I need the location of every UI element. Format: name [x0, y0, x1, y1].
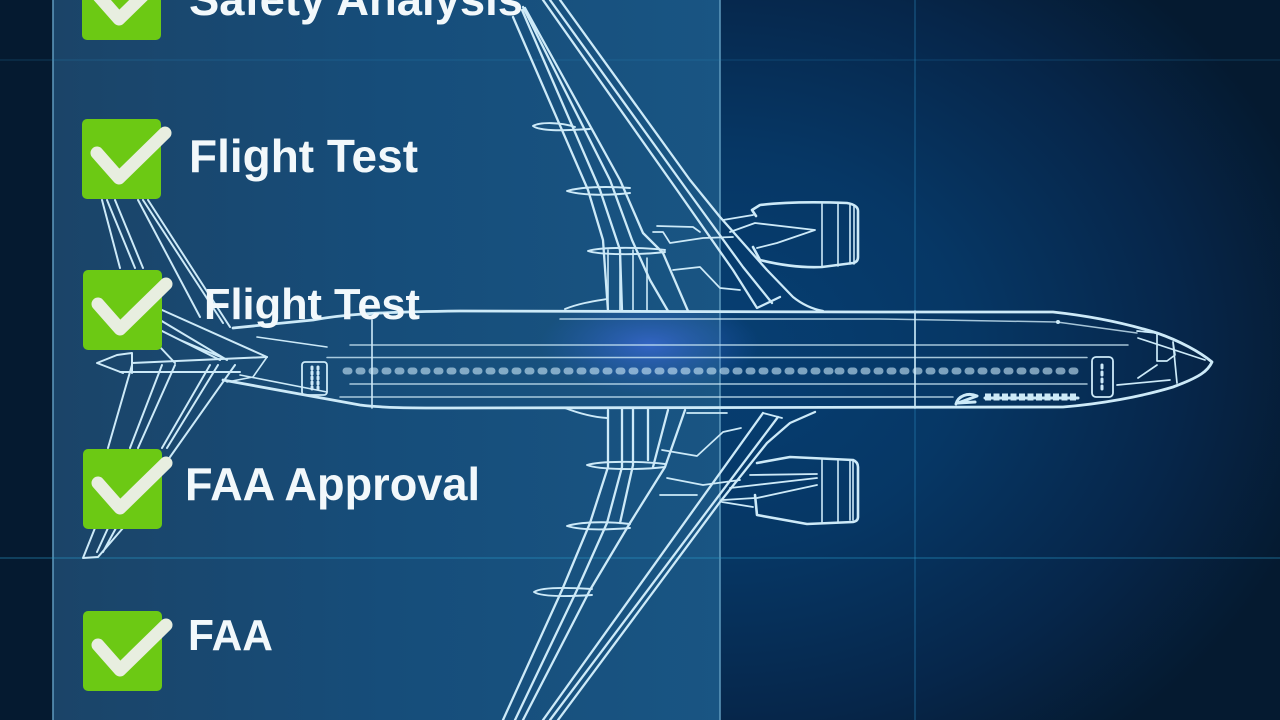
item: faa [83, 611, 273, 691]
aft door [302, 362, 327, 395]
boeing style marking [956, 394, 1078, 404]
panel: checklist overlay [53, 0, 720, 720]
item: flight test 1 [82, 119, 418, 199]
item: flight test 2 [83, 270, 420, 350]
item: faa approval [83, 449, 480, 529]
lower engine [722, 457, 858, 524]
forward door [1092, 357, 1113, 397]
cabin windows [346, 368, 1085, 374]
item: safety analysis [82, 0, 523, 40]
nose sensor dot [1056, 320, 1060, 324]
upper wing [513, 0, 823, 311]
cockpit [1117, 331, 1205, 385]
item: flight test 1: Flight Test [189, 130, 418, 182]
item: faa approval: FAA Approval [185, 458, 480, 510]
lower wing [503, 408, 815, 720]
item: faa: FAA [188, 611, 273, 660]
tail [83, 200, 267, 558]
upper engine [723, 202, 858, 267]
item: flight test 2: Flight Test [204, 280, 420, 329]
fuselage glow [490, 312, 810, 407]
fuselage [223, 311, 1212, 408]
